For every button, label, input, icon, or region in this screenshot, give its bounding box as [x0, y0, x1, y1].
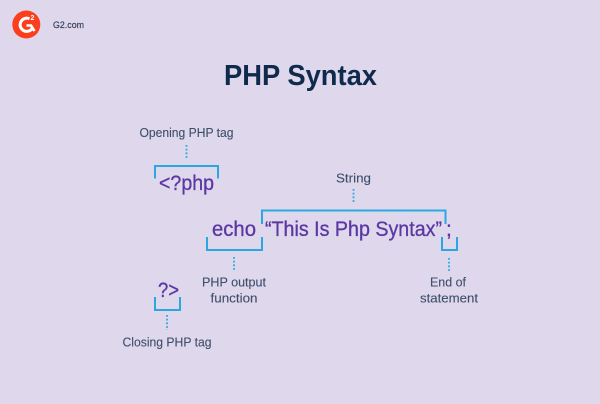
- label: string: String: [336, 172, 371, 186]
- leader: string: [352, 189, 354, 203]
- annotation: echo: [202, 218, 267, 290]
- logo: G2: 2: [30, 15, 34, 22]
- label: statement: statement: [420, 292, 479, 306]
- bracket: semicolon: [442, 237, 457, 250]
- annotation: end of statement: [430, 218, 467, 290]
- label: opening PHP tag: Opening PHP tag: [140, 126, 234, 140]
- bracket: closing tag: [155, 297, 180, 310]
- bracket: opening tag: [155, 166, 218, 178]
- title: PHP Syntax: [224, 60, 377, 92]
- annotation: closing PHP tag: [122, 279, 212, 350]
- leader: closing tag: [166, 315, 168, 330]
- leader: opening tag: [186, 145, 188, 159]
- label: closing PHP tag: Closing PHP tag: [122, 336, 212, 350]
- leader: echo: [233, 257, 235, 271]
- bracket: echo: [207, 237, 262, 250]
- code: string: “This Is Php Syntax”: [265, 218, 442, 241]
- label: PHP output function: PHP output: [202, 276, 267, 290]
- code: opening tag: <?php: [159, 172, 214, 195]
- annotation: opening PHP tag: [140, 126, 234, 195]
- logo: G2: [12, 10, 40, 38]
- label: function: function: [210, 292, 258, 306]
- bracket: string: [262, 210, 446, 224]
- annotation: string: [262, 172, 446, 241]
- leader: semicolon: [448, 258, 450, 272]
- label: end of: End of: [430, 276, 467, 290]
- code: closing tag: ?>: [158, 279, 179, 302]
- code: echo: echo: [212, 218, 256, 241]
- code: semicolon: ;: [446, 218, 452, 241]
- logo text: G2.com: G2.com: [53, 20, 84, 31]
